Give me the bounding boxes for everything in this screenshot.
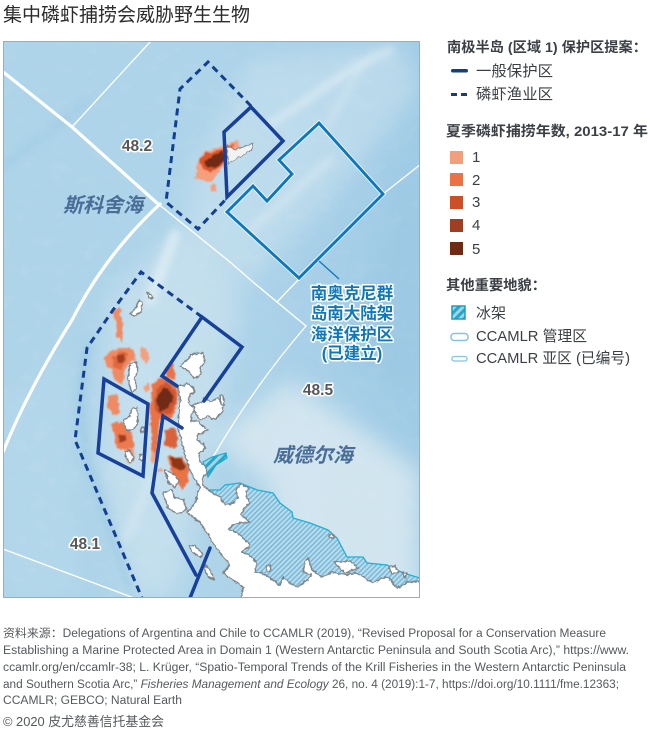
legend heading: catch years: 夏季磷虾捕捞年数, 2013-17 年: [446, 123, 648, 139]
legend: krill fishery zone: 磷虾渔业区: [476, 86, 553, 103]
label: 48.5: 48.5: [303, 382, 333, 399]
legend item 3: [450, 194, 480, 211]
legend item 5: 5: [472, 241, 480, 258]
krill catch: south patches: [103, 308, 190, 490]
map panel: [2, 41, 426, 604]
zone S2: [98, 379, 148, 476]
label: South Orkney MPA: 南奥克尼群: [311, 283, 394, 303]
south krill fishery zone: [75, 272, 202, 598]
South Orkney marine protected area: [227, 123, 383, 279]
copyright: © 2020 皮尤慈善信托基金会: [3, 714, 164, 729]
label: South Orkney MPA: [311, 283, 394, 363]
source notes: Establishing a Marine Protected Area in Domain 1 (Western Antarctic Peninsula and South Scotia Arc),” https://www.: [3, 645, 629, 657]
source notes: CCAMLR; GEBCO; Natural Earth: [3, 695, 182, 707]
legend: CCAMLR subarea: CCAMLR 亚区 (已编号): [476, 350, 630, 367]
legend item 5: [450, 241, 480, 258]
CCAMLR area and subarea boundaries: [2, 42, 421, 598]
legend heading: proposal: 南极半岛 (区域 1) 保护区提案：: [447, 39, 647, 55]
source notes: [3, 626, 629, 707]
legend item 4: 4: [472, 217, 480, 234]
label: Weddell Sea: 威德尔海: [273, 444, 356, 467]
legend item 2: 2: [472, 172, 480, 189]
legend item 3: 3: [472, 194, 480, 211]
islands: [128, 362, 138, 393]
zone S1: [162, 317, 242, 401]
legend item 1: [450, 149, 480, 166]
label: South Orkney MPA: 岛南大陆架: [311, 303, 393, 323]
label: South Orkney MPA: (已建立): [322, 343, 382, 363]
small ice shelf near peninsula: [203, 453, 227, 477]
legend: ice shelf: 冰架: [476, 305, 506, 322]
legend heading: other features: 其他重要地貌：: [446, 277, 546, 293]
ice shelf: [208, 483, 420, 598]
zone S3: [152, 416, 196, 575]
source notes: 资料来源：Delegations of Argentina and Chile to CCAMLR (2019), “Revised Proposal for a Conservation Measure: [3, 626, 606, 640]
legend: krill catch years: [446, 123, 648, 258]
label: Scotia Sea: 斯科舍海: [63, 194, 146, 217]
label: 48.1: 48.1: [70, 536, 100, 553]
sea background with bathymetry: [3, 41, 420, 598]
legend: ice shelf: [452, 305, 506, 322]
general protection zones (solid): [98, 107, 283, 598]
label: South Orkney MPA: 海洋保护区: [311, 324, 393, 344]
legend: general protection zone: 一般保护区: [476, 63, 553, 80]
source notes: ccamlr.org/en/ccamlr-38; L. Krüger, “Spatio-Temporal Trends of the Krill Fisheries in the Western Antarctic Peninsula: [3, 662, 627, 674]
krill catch: north patch: [195, 140, 240, 192]
land: Antarctic Peninsula: [124, 143, 426, 604]
legend item 2: [450, 172, 480, 189]
legend item 1: 1: [472, 149, 480, 166]
label: 48.2: 48.2: [122, 138, 152, 155]
legend item 4: [450, 217, 480, 234]
legend: CCAMLR management area: CCAMLR 管理区: [476, 328, 587, 345]
north krill fishery zone: [166, 62, 251, 229]
title: 集中磷虾捕捞会威胁野生生物: [3, 4, 250, 26]
legend: proposal: [447, 39, 647, 103]
map frame: [4, 42, 420, 598]
source notes: and Southern Scotia Arc,” Fisheries Management and Ecology 26, no. 4 (2019):1-7, https://doi.org/10.1111/fme.12363;: [3, 679, 619, 691]
north zone: [224, 107, 283, 197]
legend: other features: [446, 277, 630, 367]
